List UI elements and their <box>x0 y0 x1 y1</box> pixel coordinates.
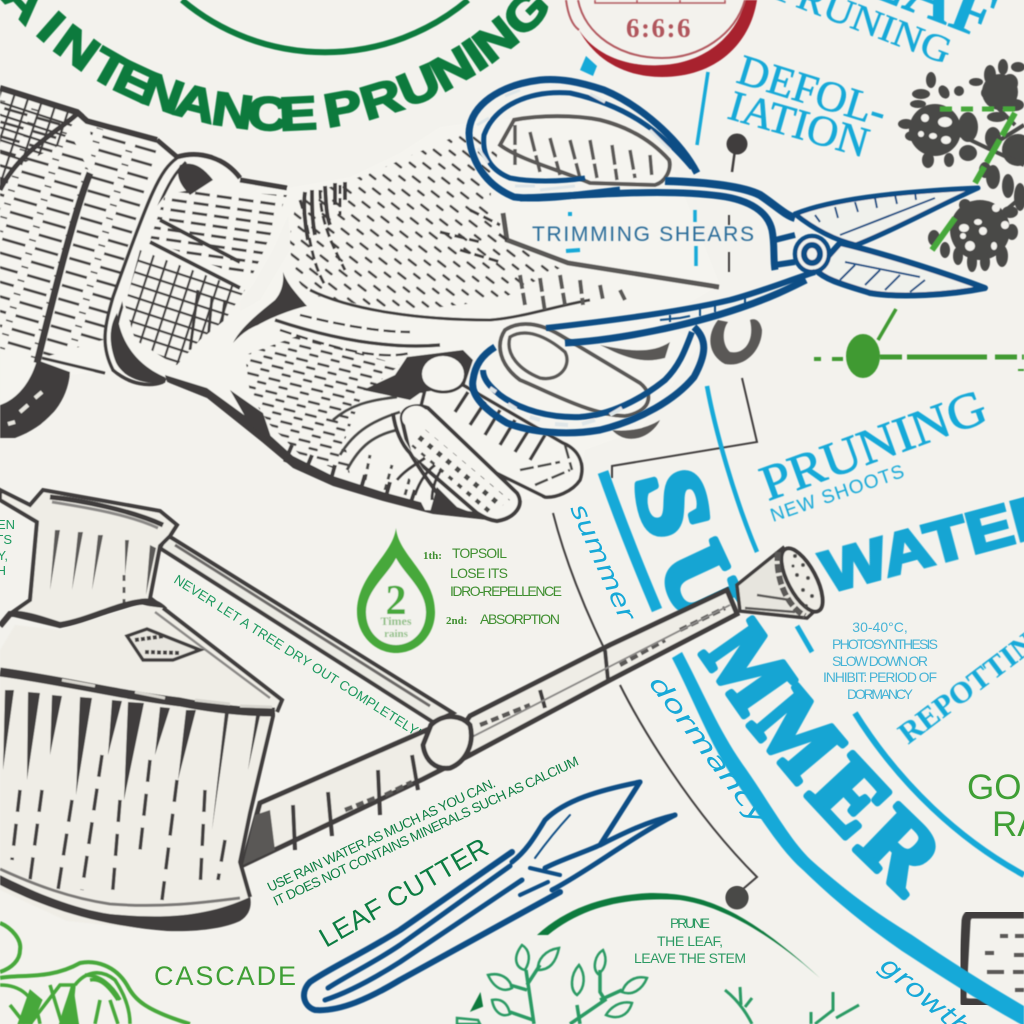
label: trimming shears: TRIMMING SHEARS <box>532 223 754 246</box>
season ring arcs <box>603 386 1024 1024</box>
illustration: leaf cluster <box>898 59 1024 272</box>
note: prune the leaf, leave the stem <box>634 915 746 966</box>
heading: maintenance pruning <box>0 0 561 141</box>
note: watering order: LOSE ITS <box>450 565 508 581</box>
badge: soil ratio 6:6:6 <box>566 0 757 77</box>
blades <box>512 782 640 862</box>
heading: maintenance pruning: I <box>454 29 497 81</box>
heading: maintenance pruning: E <box>106 50 162 114</box>
note: use rain water: IT DOES NOT CONTAINS MINERALS SUCH AS CALCIUM <box>271 754 581 909</box>
heading: maintenance pruning: N <box>422 36 483 102</box>
note: watering order: 1th: <box>423 550 442 562</box>
script labels: summer dormancy growth: summer <box>565 499 642 627</box>
badge: soil ratio 6:6:6: 6:6:6 <box>626 13 692 43</box>
illustration: notebook corner <box>962 914 1024 1003</box>
lower palm hatching <box>245 335 400 475</box>
heading: leaf pruning <box>770 0 1007 73</box>
handle <box>160 535 453 722</box>
label: trimming shears <box>532 210 754 272</box>
heading: golden ratio <box>967 768 1024 844</box>
pivot <box>795 236 829 272</box>
palm and fingers <box>165 115 720 521</box>
heading: maintenance pruning: T <box>81 38 138 101</box>
note: watering order: 2nd: <box>446 615 467 627</box>
body and upper blade <box>520 193 775 270</box>
icon: water drop two times rains: rains <box>384 628 409 640</box>
heading: maintenance pruning: N <box>464 7 528 73</box>
can body <box>0 605 282 931</box>
note: watering order: TOPSOIL <box>452 545 507 561</box>
lower blade <box>816 243 985 295</box>
heading: summer: S <box>614 459 732 547</box>
wrist <box>111 164 295 383</box>
heading: maintenance pruning: I <box>27 2 74 52</box>
label: cascade: CASCADE <box>154 961 296 991</box>
illustration: leaf sprigs <box>457 945 859 1024</box>
heading: summer: U <box>638 527 764 635</box>
heading: maintenance pruning: A <box>170 74 222 134</box>
fan hatching and shadow wedge <box>393 413 470 512</box>
finger B <box>402 406 520 521</box>
heading: defoliation: DEFOL- <box>732 47 892 136</box>
icon: water drop two times rains: 2 <box>386 578 406 624</box>
heading: summer: E <box>790 736 912 856</box>
label: leaf cutter: LEAF CUTTER <box>314 832 494 953</box>
arc: prune the leaf <box>537 886 820 978</box>
can label plate <box>127 629 200 660</box>
heading: maintenance pruning: U <box>390 54 448 118</box>
note: 30-40 degrees: DORMANCY <box>847 686 914 702</box>
illustration: leaf cutter <box>304 782 675 1010</box>
illustration: hand in sleeve <box>0 88 762 521</box>
note: 30-40 degrees: PHOTOSYNTHESIS <box>832 636 938 652</box>
note: prune the leaf, leave the stem: PRUNE <box>670 915 710 931</box>
connector lines <box>553 378 757 908</box>
finger A <box>420 385 582 497</box>
note: prune the leaf, leave the stem: LEAVE THE STEM <box>634 950 746 966</box>
note: use rain water: USE RAIN WATER AS MUCH AS YOU CAN. <box>265 775 498 895</box>
illustration: cascade bonsai <box>0 923 190 1024</box>
heading: summer <box>614 459 964 913</box>
heading: pruning new shoots: NEW SHOOTS <box>768 461 907 527</box>
marker: defoliation divider and pin <box>580 56 748 172</box>
sprinkler rose <box>737 543 831 618</box>
illustration: watering can <box>0 490 831 931</box>
icon: water drop two times rains <box>357 528 435 653</box>
handles <box>304 852 560 1010</box>
heading: maintenance pruning: P <box>320 80 366 138</box>
heading: maintenance pruning: C <box>246 87 289 141</box>
note: 30-40 degrees <box>823 619 938 702</box>
note: never let a tree dry out: NEVER LET A TREE DRY OUT COMPLETELY! <box>171 572 424 740</box>
upper handle <box>469 79 697 198</box>
note: 30-40 degrees: SLOW DOWN OR <box>832 653 928 669</box>
heading: defoliation: IATION <box>723 82 874 167</box>
thumb and index finger <box>440 116 762 439</box>
shank <box>546 272 815 328</box>
note: left edge cropped text <box>0 517 15 578</box>
spout <box>243 590 737 865</box>
icon: water drop two times rains: Times <box>380 614 412 628</box>
heading: pruning new shoots: PRUNING <box>753 378 994 511</box>
heading: maintenance pruning: N <box>209 82 256 140</box>
note: prune the leaf, leave the stem: THE LEAF, <box>657 933 723 949</box>
heading: summer: M <box>731 669 865 799</box>
note: watering order <box>423 545 562 627</box>
note: watering order: IDRO-REPELLENCE <box>450 583 562 599</box>
heading: summer: M <box>682 604 816 731</box>
heading: maintenance pruning: N <box>134 62 190 125</box>
script labels: summer dormancy growth: dormancy <box>643 670 775 831</box>
script labels: summer dormancy growth <box>565 499 977 1024</box>
illustration: trimming shears <box>469 79 985 433</box>
note: 30-40 degrees: 30-40°C, <box>852 619 908 635</box>
heading: maintenance pruning: R <box>354 69 409 131</box>
heading: maintenance pruning: E <box>278 87 318 141</box>
hand bottom edge <box>165 375 520 521</box>
sleeve <box>0 88 240 438</box>
heading: summer: R <box>839 786 964 913</box>
dark mass around nails <box>363 350 473 400</box>
note: 30-40 degrees: INHIBIT: PERIOD OF <box>823 669 937 685</box>
note: watering order: ABSORPTION <box>480 611 560 627</box>
marker: green timeline dot <box>814 309 1024 378</box>
can neck and rim <box>0 490 177 626</box>
lower handle <box>473 327 704 433</box>
heading: maintenance pruning: N <box>45 15 109 81</box>
